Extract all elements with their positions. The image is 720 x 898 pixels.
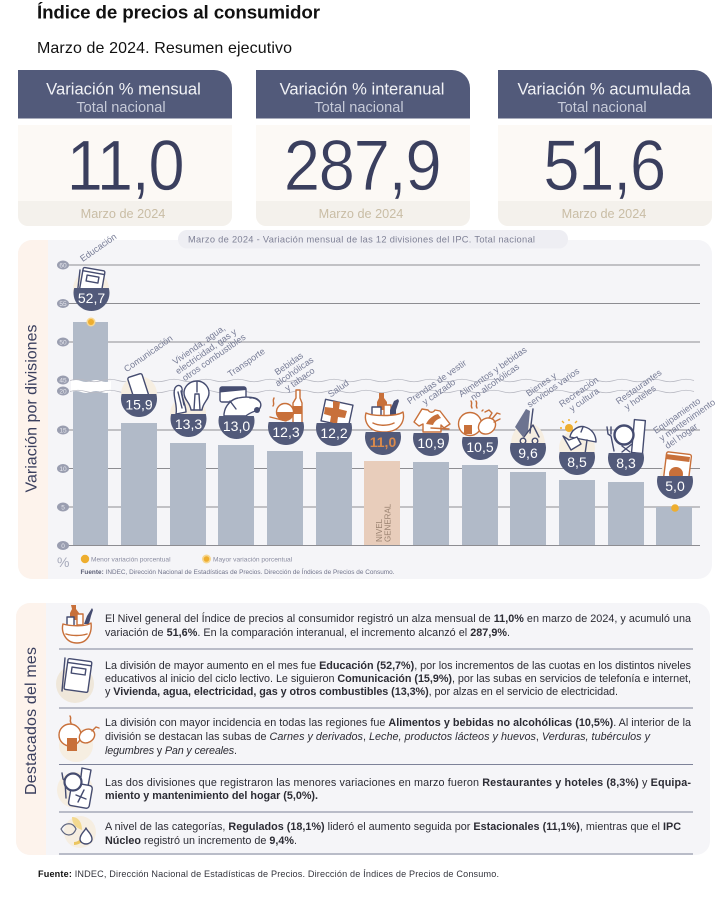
label: alimentos: no alcohólicas	[469, 361, 522, 402]
division: comunicación: 15,9	[125, 396, 153, 412]
card: variación interanual	[256, 70, 470, 226]
legend: Mayor variación porcentual	[213, 556, 293, 564]
division: transporte	[218, 387, 261, 439]
division: bienes: 9,6	[518, 445, 538, 461]
label: recreación: Recreación	[557, 375, 600, 409]
source note: Fuente: INDEC, Dirección Nacional de Estadísticas de Precios. Dirección de Índices de Precios de Consumo.	[38, 869, 499, 879]
label: recreación: y cultura	[567, 386, 601, 413]
grid and axis ticks: 50	[59, 340, 67, 346]
label: vivienda: electricidad, gas y	[174, 326, 239, 376]
card: variación acumulada: Variación % acumulada	[517, 80, 691, 98]
division: nivel general: 11,0	[370, 434, 396, 450]
division: alimentos: 10,5	[466, 439, 494, 455]
text: alimentos: La división con mayor incidencia en todas las regiones fue Alimentos y bebidas no alcohólicas (10,5%). Al interior de la	[105, 717, 691, 729]
grid and axis ticks: 15	[59, 428, 67, 434]
y axis title: Variación por divisiones	[24, 324, 40, 492]
label: equipamiento: y mantenimiento	[657, 397, 717, 443]
marker: mayor variación	[86, 318, 96, 326]
division: prendas	[413, 409, 450, 456]
legend	[81, 554, 293, 564]
label: educación: Educación	[78, 231, 118, 264]
card: variación mensual	[18, 70, 232, 226]
heading: destacados: Destacados del mes	[23, 647, 40, 795]
division: comunicación	[121, 373, 157, 417]
marker: menor variación	[671, 504, 679, 512]
nivel general label: NIVEL	[375, 518, 384, 542]
text: nivel general	[105, 612, 691, 639]
grid and axis ticks: 10	[59, 466, 67, 473]
division: prendas: 10,9	[417, 435, 445, 451]
label: comunicación: Comunicación	[122, 333, 175, 374]
card: variación acumulada	[498, 70, 712, 226]
grid and axis ticks: 60	[59, 262, 67, 270]
text: categorías	[105, 821, 681, 847]
card: variación interanual: Total nacional	[314, 100, 404, 116]
division: bebidas	[268, 390, 304, 445]
division: recreación: 8,5	[567, 454, 587, 470]
text: menores variaciones: Las dos divisiones que registraron las menores variaciones en marzo fueron Restaurantes y hoteles (8,3%) y Equipa-	[105, 777, 691, 789]
text: educación: y Vivienda, agua, electricidad, gas y otros combustibles (13,3%), por alzas en el servicio de electricidad.	[105, 686, 618, 698]
icon: viajes y cubiertos	[57, 768, 93, 809]
text: nivel general: variación de 51,6%. En la comparación interanual, el incremento alcanzó el 287,9%.	[105, 627, 510, 639]
division: nivel general	[365, 393, 403, 455]
grid and axis ticks: 5	[61, 504, 65, 512]
text: categorías: Núcleo registró un incremento de 9,4%.	[105, 835, 297, 847]
label: restaurantes: y hoteles	[622, 383, 658, 412]
chart title pill: Marzo de 2024 - Variación mensual de las 12 divisiones del IPC. Total nacional	[188, 234, 535, 244]
label: alimentos: Alimentos y bebidas	[457, 344, 529, 399]
separators	[59, 649, 693, 854]
card: variación mensual: 11,0	[67, 127, 183, 206]
text: educación	[105, 660, 692, 698]
label: bienes: servicios varios	[525, 366, 582, 409]
card: variación interanual: Marzo de 2024	[319, 207, 403, 221]
division: vivienda	[170, 381, 209, 437]
label: equipamiento: del hogar	[663, 421, 699, 451]
division: recreación	[559, 419, 596, 475]
label: transporte: Transporte	[226, 346, 267, 379]
division: restaurantes: 8,3	[616, 455, 636, 471]
panel: destacados del mes	[16, 603, 710, 855]
division: alimentos	[458, 401, 500, 460]
axis break	[70, 379, 694, 393]
label: vivienda: Vivienda, agua,	[171, 323, 227, 367]
card: variación mensual: Variación % mensual	[46, 80, 201, 98]
label: prendas: Prendas de vestir	[405, 358, 468, 406]
legend: Menor variación porcentual	[91, 556, 171, 564]
division: bienes	[510, 409, 546, 466]
chart title pill	[178, 230, 568, 248]
label: prendas: y calzado	[420, 377, 457, 407]
card: variación acumulada: 51,6	[543, 127, 665, 206]
icon: cuaderno	[56, 658, 94, 703]
grid and axis ticks: 0	[61, 543, 65, 550]
title: Índice de precios al consumidor	[37, 2, 321, 22]
card: variación interanual: Variación % interanual	[280, 80, 444, 98]
division: vivienda: 13,3	[175, 416, 202, 432]
label: bebidas: y tabaco	[283, 365, 317, 393]
card: variación mensual: Total nacional	[76, 100, 166, 116]
percent sign: %	[57, 554, 69, 570]
division: salud: 12,2	[320, 425, 348, 441]
division: equipamiento: 5,0	[665, 478, 685, 494]
text: categorías: A nivel de las categorías, Regulados (18,1%) lideró el aumento seguida por Estacionales (11,1%), mientras que el IPC	[105, 821, 681, 833]
division: educación: 52,7	[78, 290, 105, 306]
division: salud	[316, 399, 353, 446]
icon: canasta	[63, 605, 93, 643]
text: menores variaciones	[105, 777, 691, 802]
text: nivel general: El Nivel general del Índice de precios al consumidor registró un alza mensual de 11,0% en marzo de 2024, y acumuló una	[105, 612, 691, 625]
division: educación	[73, 267, 110, 311]
card: variación interanual: 287,9	[284, 127, 440, 206]
text: alimentos	[105, 717, 691, 757]
icon: frutas y verduras	[61, 816, 96, 848]
grid and axis ticks: 45	[59, 378, 67, 384]
division: restaurantes	[607, 420, 645, 476]
subtitle: Marzo de 2024. Resumen ejecutivo	[37, 40, 292, 57]
text: alimentos: legumbres y Pan y cereales.	[105, 745, 237, 757]
card: variación acumulada: Total nacional	[557, 100, 647, 116]
grid and axis ticks: 20	[59, 388, 67, 396]
label: bienes: Bienes y	[524, 370, 559, 398]
text: alimentos: división se destacan las subas de Carnes y derivados, Leche, productos lácteos y huevos, Verduras, tubérculos y	[105, 731, 651, 743]
label: bebidas: alcohólicas	[273, 354, 316, 388]
text: menores variaciones: miento y mantenimiento del hogar (5,0%).	[105, 790, 318, 802]
card: variación acumulada: Marzo de 2024	[562, 207, 646, 221]
label: restaurantes: Restaurantes	[614, 367, 664, 406]
bar chart	[73, 322, 692, 545]
nivel general label: GENERAL	[384, 503, 392, 542]
label: salud: Salud	[326, 378, 351, 399]
grid and axis ticks: 55	[59, 301, 67, 308]
division: equipamiento	[657, 452, 693, 499]
text: educación: La división de mayor aumento en el mes fue Educación (52,7%), por los incrementos de las cuotas en los distintos niveles	[105, 660, 692, 672]
label: vivienda: otros combustibles	[180, 332, 248, 383]
division: bebidas: 12,3	[272, 424, 300, 440]
chart source: Fuente: INDEC, Dirección Nacional de Estadísticas de Precios. Dirección de Índices de Precios de Consumo.	[80, 567, 395, 576]
icon: alimentos	[59, 716, 99, 762]
division: transporte: 13,0	[223, 418, 250, 434]
card: variación mensual: Marzo de 2024	[81, 207, 165, 221]
grid and axis ticks	[57, 260, 700, 550]
panel: variación por divisiones	[18, 230, 720, 579]
label: bebidas: Bebidas	[273, 350, 305, 377]
text: educación: educativos al inicio del ciclo lectivo. Le siguieron Comunicación (15,9%), por las subas en servicios de telefonía e internet,	[105, 673, 691, 685]
label: equipamiento: Equipamiento	[651, 396, 702, 436]
